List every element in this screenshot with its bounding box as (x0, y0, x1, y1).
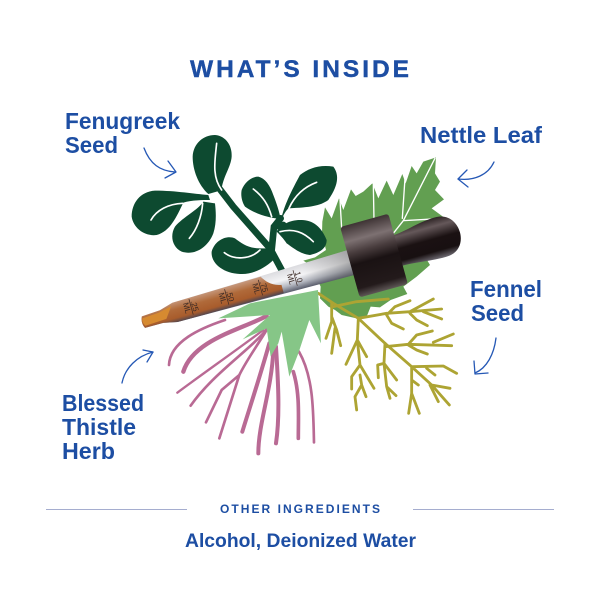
dropper markings: .50 (224, 289, 236, 303)
fenugreek stems (217, 185, 283, 270)
arrow: to fenugreek (144, 148, 176, 178)
fenugreek leaves (132, 135, 337, 274)
dropper tip highlight (141, 306, 174, 326)
label: Fennel Seed: Fennel (470, 276, 542, 302)
dropper markings: ML (217, 292, 228, 305)
arrow: to thistle (122, 350, 153, 383)
dropper cap (340, 214, 408, 297)
arrow: to fennel (474, 338, 496, 374)
dropper markings: .75 (258, 280, 270, 294)
icon: blessed thistle (169, 290, 321, 453)
title: WHAT’S INSIDE (190, 56, 409, 83)
label: Fennel Seed: Seed (471, 300, 524, 326)
label: Blessed Thistle Herb: Blessed (62, 390, 144, 416)
icon: fennel sprig (318, 293, 457, 413)
dropper glass shading (300, 248, 360, 288)
label: Nettle Leaf: Nettle Leaf (420, 122, 542, 148)
divider right (413, 509, 554, 510)
divider left (46, 509, 187, 510)
label: Fennel Seed (470, 276, 542, 326)
label: Blessed Thistle Herb: Thistle (62, 414, 136, 440)
dropper markings: ML (250, 282, 262, 296)
dropper glass tube (138, 248, 360, 333)
label: Fenugreek Seed: Fenugreek (65, 108, 180, 134)
label: Blessed Thistle Herb (62, 390, 144, 464)
dropper markings (180, 268, 305, 317)
arrow: to nettle leaf (458, 162, 494, 187)
icon: nettle leaf (303, 157, 445, 318)
fenugreek veins (151, 143, 317, 258)
dropper markings: .25 (189, 299, 200, 313)
dropper markings: ML (181, 301, 193, 315)
label: Fenugreek Seed: Seed (65, 132, 118, 158)
dropper liquid (139, 272, 284, 332)
dropper markings: ML (285, 273, 297, 286)
heading: other ingredients: OTHER INGREDIENTS (220, 502, 380, 516)
label: Blessed Thistle Herb: Herb (62, 438, 115, 464)
text: other ingredients list: Alcohol, Deionized Water (185, 530, 416, 552)
dropper bulb (387, 212, 465, 270)
icon: dropper (132, 197, 470, 355)
dropper markings: 1.0 (293, 270, 304, 284)
label: Fenugreek Seed (65, 108, 180, 158)
icon: fenugreek sprig (132, 135, 337, 274)
